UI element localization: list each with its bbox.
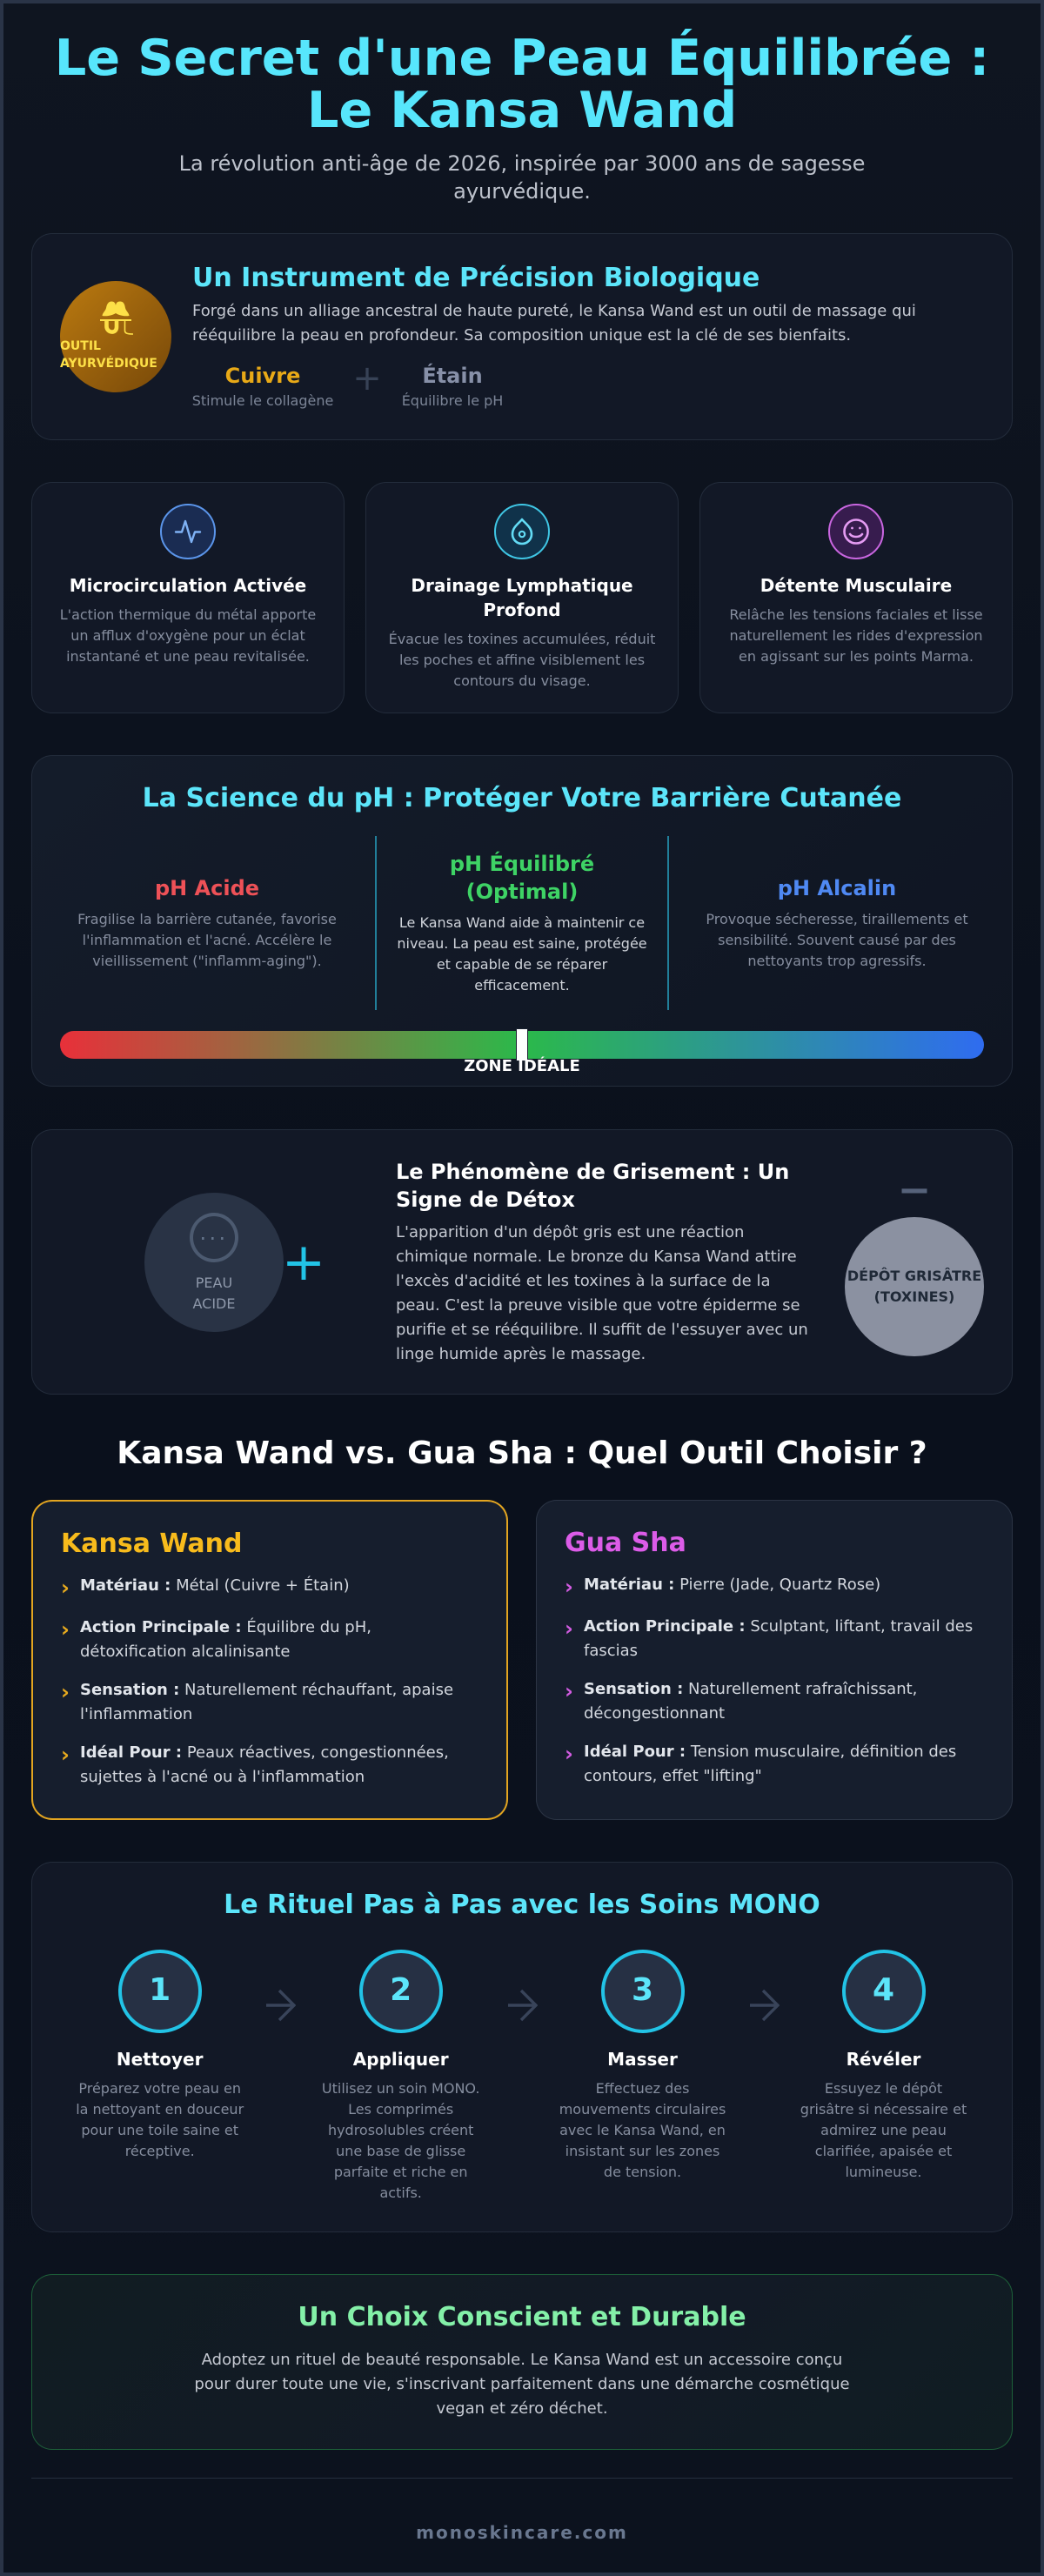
card text: naturellement les rides d'expression [729,627,983,644]
icon: drop [494,504,550,559]
card text: les poches et affine visiblement les [399,652,645,668]
step text: réceptive. [125,2143,195,2159]
peau acide label: PEAU [196,1275,232,1291]
metal: cuivre [192,364,333,409]
card text: L'action thermique du métal apporte [60,606,316,623]
step text: mouvements circulaires [559,2101,726,2118]
step text: pour une toile saine et [81,2122,238,2138]
description: peau. C'est la preuve visible que votre épiderme se [396,1296,800,1315]
diagram: dépôt grisâtre [845,1217,984,1356]
step text: Utilisez un soin MONO. [322,2080,479,2097]
card heading: Drainage Lymphatique [411,574,633,595]
card text: contours du visage. [453,672,591,689]
step name: Révéler [847,2049,920,2070]
number: 1 [149,1971,171,2008]
step text: parfaite et riche en [334,2164,468,2180]
card text: Évacue les toxines accumulées, réduit [389,631,655,647]
step text [797,2078,971,2183]
heading: Signe de Détox [396,1187,575,1211]
peau acide label: ACIDE [193,1295,235,1312]
icon: smile [828,504,884,559]
arrow 2 [506,1989,538,2022]
balanced text: niveau. La peau est saine, protégée [397,935,647,952]
balanced text: efficacement. [474,977,570,994]
step text [555,2078,729,2183]
step 2 [314,1950,488,2211]
balanced heading [450,851,594,904]
alkaline text: sensibilité. Souvent causé par des [718,932,956,948]
badge label: AYURVÉDIQUE [60,357,157,371]
description: L'apparition d'un dépôt gris est une réaction [396,1223,744,1241]
gua sha heading: Gua Sha [565,1528,686,1558]
ideal zone label: ZONE IDÉALE [464,1057,580,1075]
description: rééquilibre la peau en profondeur. Sa composition unique est la clé de ses bienfaits. [192,326,851,345]
step text: admirez une peau [820,2122,947,2138]
panel: choix conscient [31,2274,1013,2450]
panel: phénomène de grisement [31,1129,1013,1395]
arrow 3 [748,1989,780,2022]
acid heading: pH Acide [155,876,259,900]
balanced text [397,914,647,994]
number circle [600,1950,684,2033]
step text: une base de glisse [336,2143,465,2159]
bullet: › [565,1679,573,1703]
plus sign: + [282,1232,325,1293]
heading [396,1159,789,1211]
icon: pulse [160,504,216,559]
card text: instantané et une peau revitalisée. [66,648,310,665]
panel: microcirculation [31,482,345,713]
heading: Le Rituel Pas à Pas avec les Soins MONO [224,1890,820,1920]
description: linge humide après le massage. [396,1345,646,1363]
title [55,29,989,139]
cuivre caption: Stimule le collagène [192,391,333,409]
description: Adoptez un rituel de beauté responsable. Le Kansa Wand est un accessoire conçu [202,2351,842,2369]
title: Le Secret d'une Peau Équilibrée : [55,29,989,87]
ring dots: ... [199,1221,229,1245]
item text [80,1743,449,1786]
card heading: Microcirculation Activée [70,575,306,596]
item text: Action Principale : Équilibre du pH, [80,1618,371,1636]
cuivre name: Cuivre [225,364,300,388]
balanced text: et capable de se réparer [437,956,607,973]
subtitle: La révolution anti-âge de 2026, inspirée par 3000 ans de sagesse [179,151,865,176]
bullet: › [565,1616,573,1641]
step 4 [797,1950,971,2185]
item text: Matériau : Pierre (Jade, Quartz Rose) [584,1576,880,1594]
step text: insistant sur les zones [566,2143,719,2159]
step text: avec le Kansa Wand, en [559,2122,726,2138]
item text: Idéal Pour : Peaux réactives, congestionnées, [80,1743,449,1762]
footer url: monoskincare.com [416,2522,628,2543]
item text: sujettes à l'acné ou à l'inflammation [80,1768,365,1786]
balanced heading: pH Équilibré [450,852,594,876]
acid text: Fragilise la barrière cutanée, favorise [77,911,337,927]
item text: détoxification alcalinisante [80,1643,290,1661]
icon: skin ring [190,1213,238,1262]
list item: sensation [61,1680,453,1723]
column: pH alcalin [706,876,968,969]
item text: Action Principale : Sculptant, liftant, travail des [584,1617,973,1636]
list item: sensation [565,1679,917,1723]
subtitle: ayurvédique. [453,179,591,204]
title: Le Kansa Wand [307,80,737,139]
deposit label: (TOXINES) [874,1288,954,1305]
alkaline text: nettoyants trop agressifs. [747,953,927,969]
bullet: › [61,1743,70,1767]
heading: Un Choix Conscient et Durable [298,2302,746,2332]
step name: Masser [607,2049,678,2070]
heading: La Science du pH : Protéger Votre Barrière Cutanée [143,783,901,813]
step text: hydrosolubles créent [328,2122,473,2138]
description: l'excès d'acidité et les toxines à la surface de la [396,1272,770,1290]
card heading: Profond [483,599,561,619]
card text [389,631,655,689]
deposit label [847,1267,981,1305]
number circle [359,1950,443,2033]
column: pH équilibré [397,851,647,994]
step text: grisâtre si nécessaire et [800,2101,967,2118]
step text: Effectuez des [596,2080,689,2097]
column: pH acide [77,876,337,969]
card text [729,606,983,665]
description [192,302,916,345]
plus sign: + [352,358,382,398]
item text: l'inflammation [80,1705,192,1723]
étain caption: Équilibre le pH [402,391,503,409]
kansa heading: Kansa Wand [61,1529,242,1559]
number: 4 [873,1971,894,2008]
number: 3 [632,1971,653,2008]
number: 2 [390,1971,412,2008]
balanced text: Le Kansa Wand aide à maintenir ce [399,914,645,931]
item text [584,1617,973,1660]
description: Forgé dans un alliage ancestral de haute pureté, le Kansa Wand est un outil de massage qui [192,302,916,320]
badge label: OUTIL [60,339,101,353]
item text: Matériau : Métal (Cuivre + Étain) [80,1576,350,1595]
subtitle [179,151,865,204]
item text [80,1681,453,1723]
peau acide label [193,1275,235,1312]
bullet: › [565,1742,573,1766]
panel: gua sha [536,1500,1013,1820]
item text: Idéal Pour : Tension musculaire, définition des [584,1743,956,1761]
step text: la nettoyant en douceur [76,2101,244,2118]
badge label [60,339,157,371]
step 3 [555,1950,729,2185]
step text: clarifiée, apaisée et [815,2143,952,2159]
list item: action [565,1616,973,1660]
step text: lumineuse. [845,2164,922,2180]
number circle [842,1950,926,2033]
card heading [411,574,633,619]
bullet: › [565,1575,573,1599]
pH gradient bar [60,1031,984,1059]
item text [80,1618,371,1661]
description: chimique normale. Le bronze du Kansa Wand attire [396,1248,797,1266]
step text: Essuyez le dépôt [825,2080,942,2097]
step 1 [73,1950,247,2185]
étain name: Étain [422,364,483,388]
list item: idéal pour [565,1742,956,1785]
ideal zone marker [517,1029,527,1061]
step text [73,2078,247,2162]
step text: Les comprimés [348,2101,453,2118]
card text: un afflux d'oxygène pour un éclat [70,627,305,644]
description: purifie et se rééquilibre. Il suffit de l'essuyer avec un [396,1321,808,1339]
list item: matériau [565,1575,880,1599]
description [31,2348,1013,2421]
item text: décongestionnant [584,1704,725,1723]
card heading: Détente Musculaire [760,575,952,596]
panel: drainage [365,482,679,713]
acid text: l'inflammation et l'acné. Accélère le [83,932,331,948]
bullet: › [61,1680,70,1704]
panel: détente [699,482,1013,713]
alkaline text: Provoque sécheresse, tiraillements et [706,911,968,927]
alkaline text [706,911,968,969]
metal: étain [402,364,503,409]
acid text [77,911,337,969]
balanced heading: (Optimal) [466,880,578,904]
card text: en agissant sur les points Marma. [739,648,974,665]
item text [584,1740,956,1789]
item text: fascias [584,1642,638,1660]
description [396,1223,808,1363]
diagram: peau acide [144,1193,284,1332]
number circle [118,1950,202,2033]
section heading: comparison: Kansa Wand vs. Gua Sha : Quel Outil Choisir ? [117,1435,927,1471]
card text: Relâche les tensions faciales et lisse [729,606,983,623]
item text: contours, effet "lifting" [584,1767,762,1785]
icon: outil ayurvédique badge [60,281,171,392]
step name: Nettoyer [117,2049,204,2070]
heading: Le Phénomène de Grisement : Un [396,1159,789,1183]
description: pour durer toute une vie, s'inscrivant parfaitement dans une démarche cosmétique [194,2375,850,2393]
step text: de tension. [604,2164,681,2180]
alkaline heading: pH Alcalin [778,876,896,900]
panel: rituel pas à pas [31,1862,1013,2232]
arrow 1 [264,1989,296,2022]
list item: matériau [61,1576,350,1600]
list item: idéal pour [61,1743,449,1786]
icon: lamp glyph [100,301,133,335]
panel: kansa wand [31,1500,508,1820]
panel: instrument de précision [31,233,1013,440]
minus sign: – [899,1150,930,1223]
card text [60,606,316,665]
item text [584,1680,917,1723]
item text: Sensation : Naturellement rafraîchissant, [584,1680,917,1698]
acid text: vieillissement ("inflamm-aging"). [92,953,322,969]
step text: Préparez votre peau en [78,2080,241,2097]
list item: action [61,1617,371,1661]
bullet: › [61,1576,70,1600]
heading: Un Instrument de Précision Biologique [192,263,760,292]
step name: Appliquer [353,2049,449,2070]
item text: Sensation : Naturellement réchauffant, apaise [80,1681,453,1699]
bullet: › [61,1617,70,1642]
step text: actifs. [379,2185,422,2201]
step text [314,2078,488,2204]
deposit label: DÉPÔT GRISÂTRE [847,1267,981,1284]
panel: science du pH [31,755,1013,1087]
description: vegan et zéro déchet. [436,2399,608,2418]
